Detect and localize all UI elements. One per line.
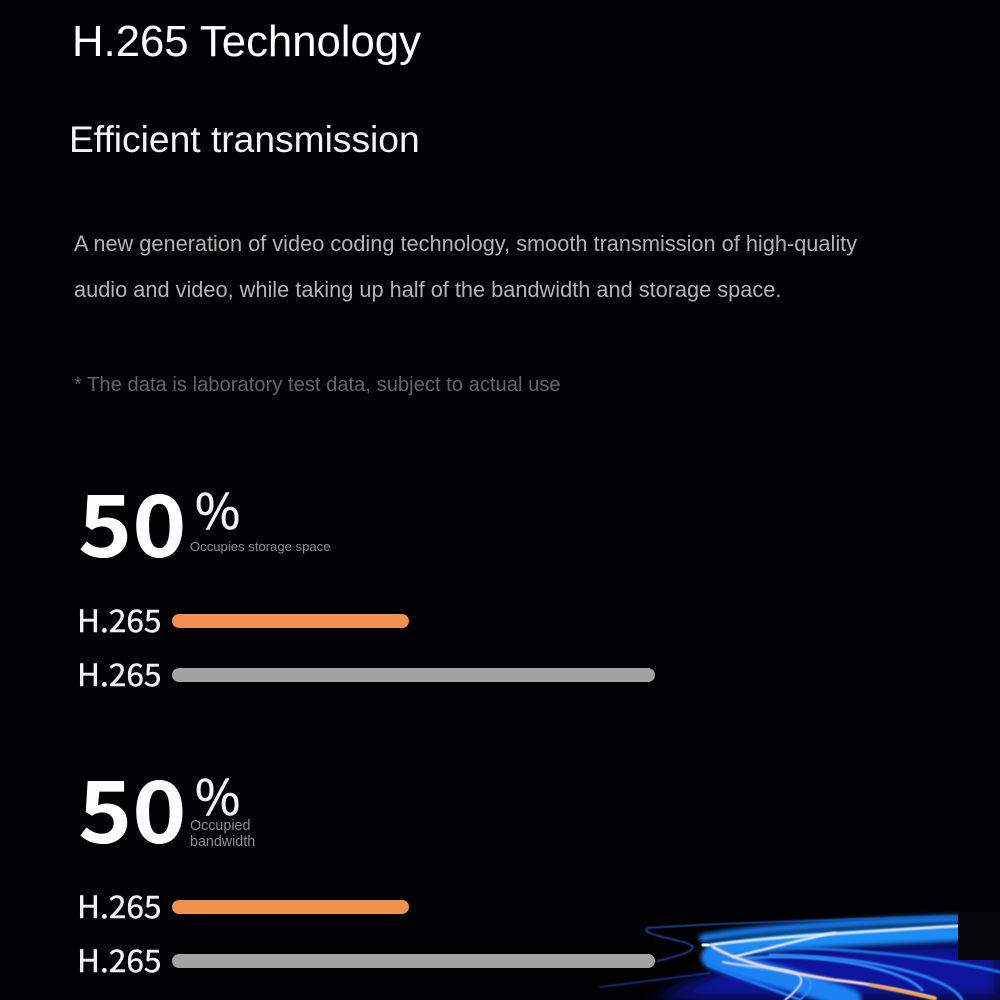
bar: orange (172, 900, 409, 914)
label: occupied bandwidth: bandwidth (190, 834, 255, 850)
label: first codec: H.265 (77, 882, 161, 927)
label: second codec: H.265 (77, 650, 161, 695)
stat: 50 percent: 50 (78, 743, 187, 868)
label: occupied bandwidth (190, 818, 255, 850)
description text (74, 231, 857, 302)
percent sign: % (195, 759, 240, 830)
panel: storage space comparison (77, 457, 655, 695)
subtitle: Efficient transmission (69, 118, 420, 160)
description text: audio and video, while taking up half of the bandwidth and storage space. (74, 277, 781, 302)
bar: orange (172, 614, 409, 628)
label: second codec: H.265 (77, 936, 161, 981)
description text: A new generation of video coding technology, smooth transmission of high-quality (74, 231, 857, 256)
footnote: * The data is laboratory test data, subject to actual use (74, 374, 561, 396)
label: occupied bandwidth: Occupied (190, 818, 250, 834)
title: H.265 Technology (72, 17, 421, 66)
percent sign: % (195, 473, 240, 544)
stat: 50 percent: 50 (78, 457, 187, 582)
panel: bandwidth comparison (77, 743, 655, 981)
label: occupies storage space: Occupies storage space (190, 539, 330, 554)
label: first codec: H.265 (77, 596, 161, 641)
bar: gray (172, 954, 655, 968)
bar: gray (172, 668, 655, 682)
